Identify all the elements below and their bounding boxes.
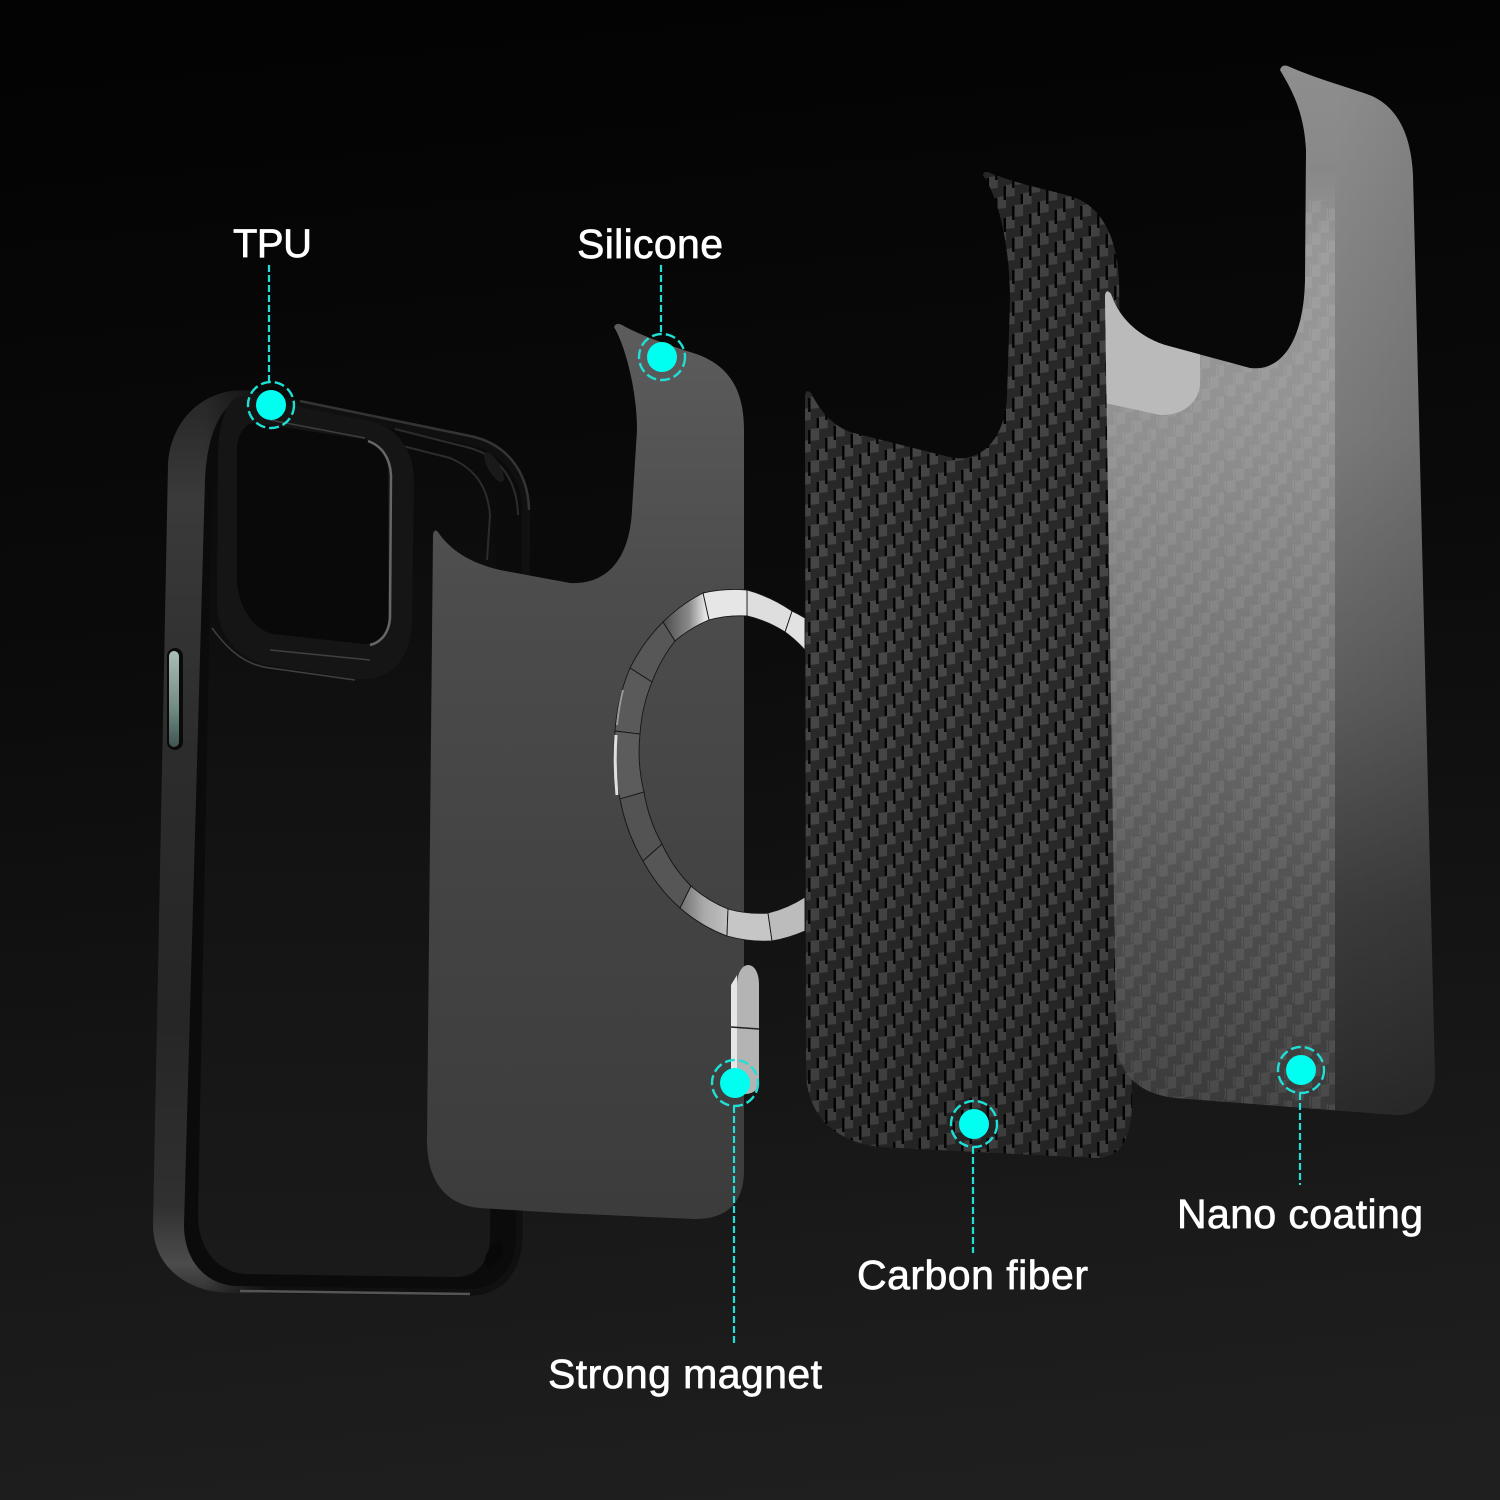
label: Nano coating: Nano coating — [1177, 1191, 1423, 1237]
carbon fiber layer — [805, 172, 1132, 1158]
silicone layer — [427, 324, 744, 1219]
small magnet bar — [731, 965, 759, 1094]
camera ring — [217, 396, 414, 679]
label: Carbon fiber — [857, 1101, 1088, 1298]
label: Strong magnet: Strong magnet — [548, 1351, 823, 1397]
label: Nano coating — [1177, 1047, 1423, 1237]
label: Silicone: Silicone — [577, 221, 723, 267]
side button — [167, 648, 183, 750]
ring segments — [785, 611, 805, 650]
nano coating layer — [1100, 60, 1440, 1120]
dark rim — [184, 400, 522, 1289]
label: Strong magnet — [548, 1060, 823, 1397]
label: TPU: TPU — [233, 222, 312, 266]
label: TPU — [233, 222, 312, 428]
magnet ring — [614, 589, 805, 941]
top edge highlight — [300, 401, 529, 510]
outer side band — [153, 390, 530, 1296]
phone case frame (TPU) — [153, 390, 530, 1296]
label: Carbon fiber: Carbon fiber — [857, 1252, 1088, 1298]
speaker cutouts — [480, 449, 508, 485]
light corner patch — [1100, 285, 1200, 415]
case interior — [198, 418, 497, 1277]
label: Silicone — [577, 221, 723, 380]
